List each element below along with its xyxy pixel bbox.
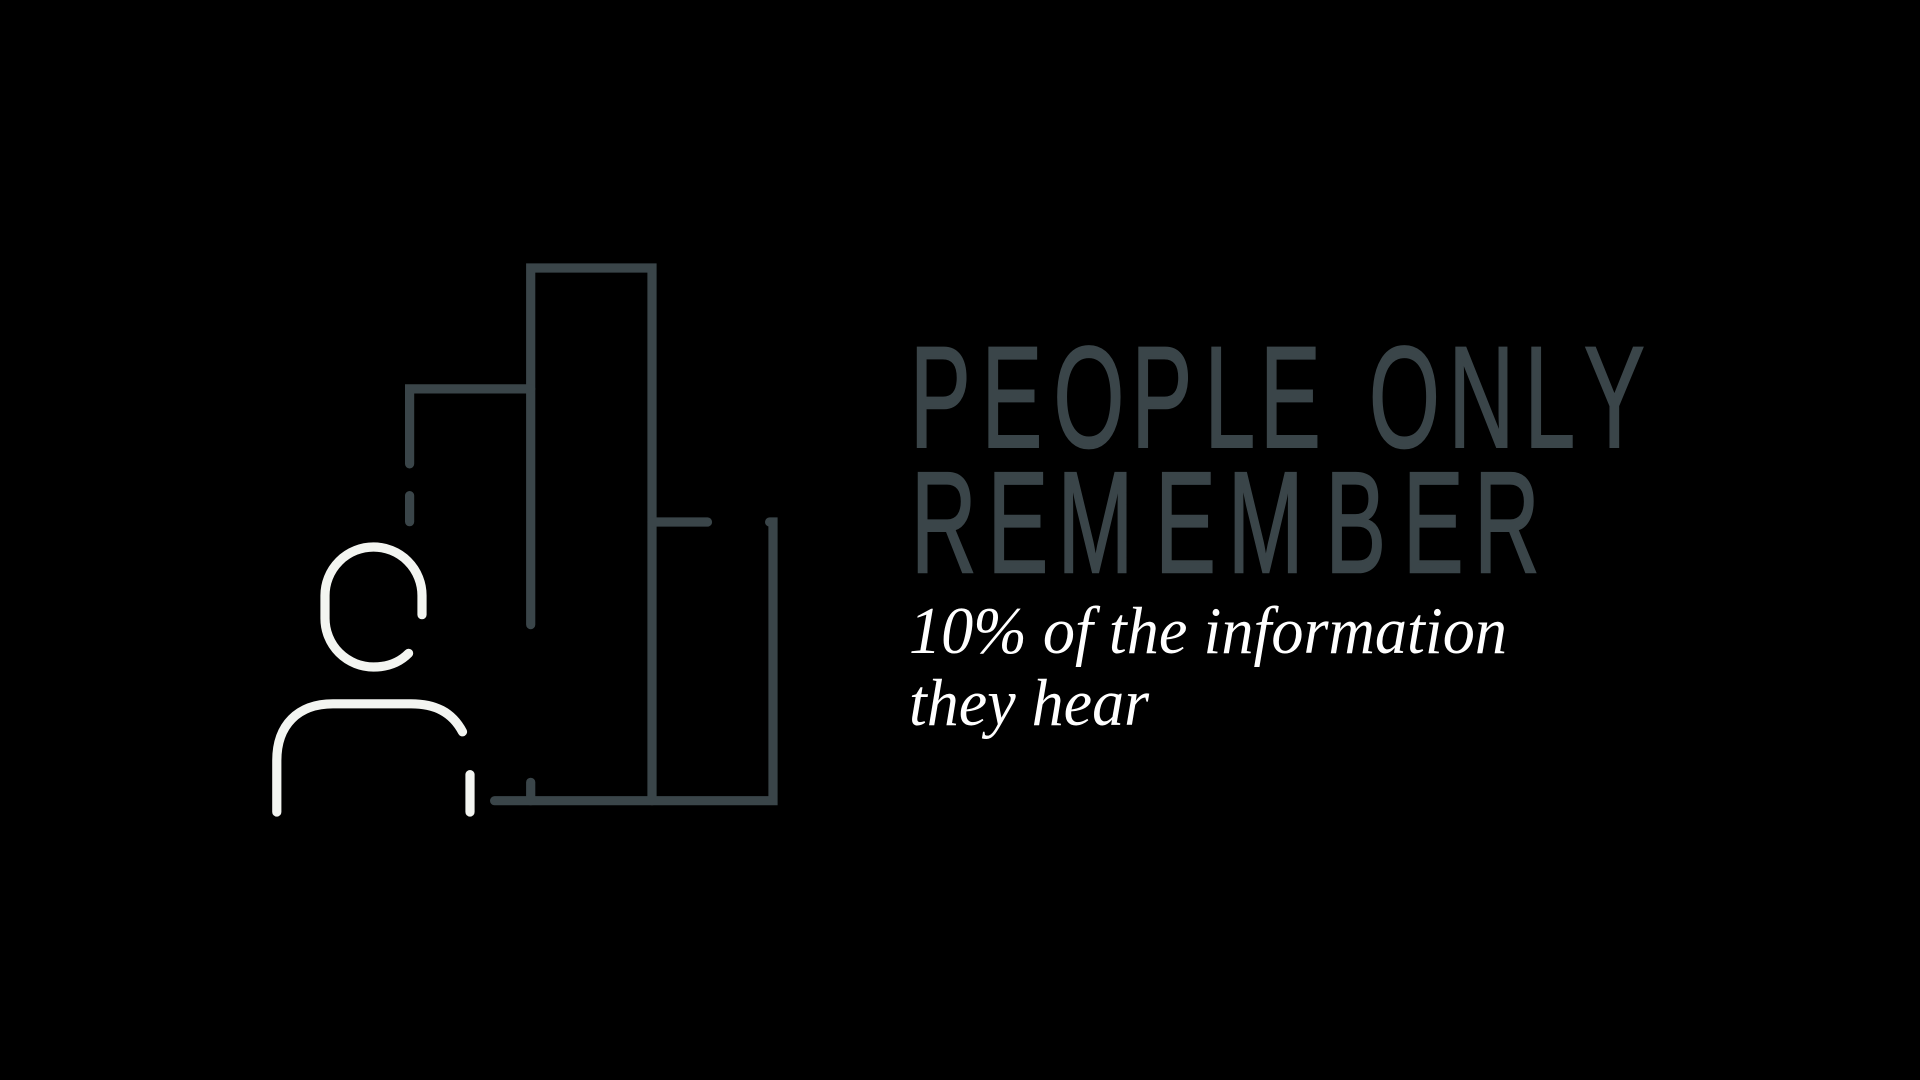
right bar side and baseline <box>495 522 773 801</box>
person head <box>325 547 422 667</box>
tall centre bar <box>531 268 652 801</box>
left bar upper outline <box>410 389 531 464</box>
right bar top stub <box>652 517 708 527</box>
subheading <box>909 594 1507 740</box>
icon: bar chart drawn as broken outlines <box>410 268 773 801</box>
heading line 1: PEOPLE ONLY <box>910 317 1645 478</box>
heading <box>910 317 1645 603</box>
left bar dash <box>405 496 414 522</box>
icon: person outline <box>277 547 470 812</box>
heading line 2: REMEMBER <box>911 442 1540 603</box>
subheading line 2: they hear <box>909 666 1150 740</box>
person shoulder dash <box>465 775 475 812</box>
subheading line 1: 10% of the information <box>909 594 1507 668</box>
baseline tick <box>526 782 535 801</box>
person shoulders <box>277 704 462 812</box>
